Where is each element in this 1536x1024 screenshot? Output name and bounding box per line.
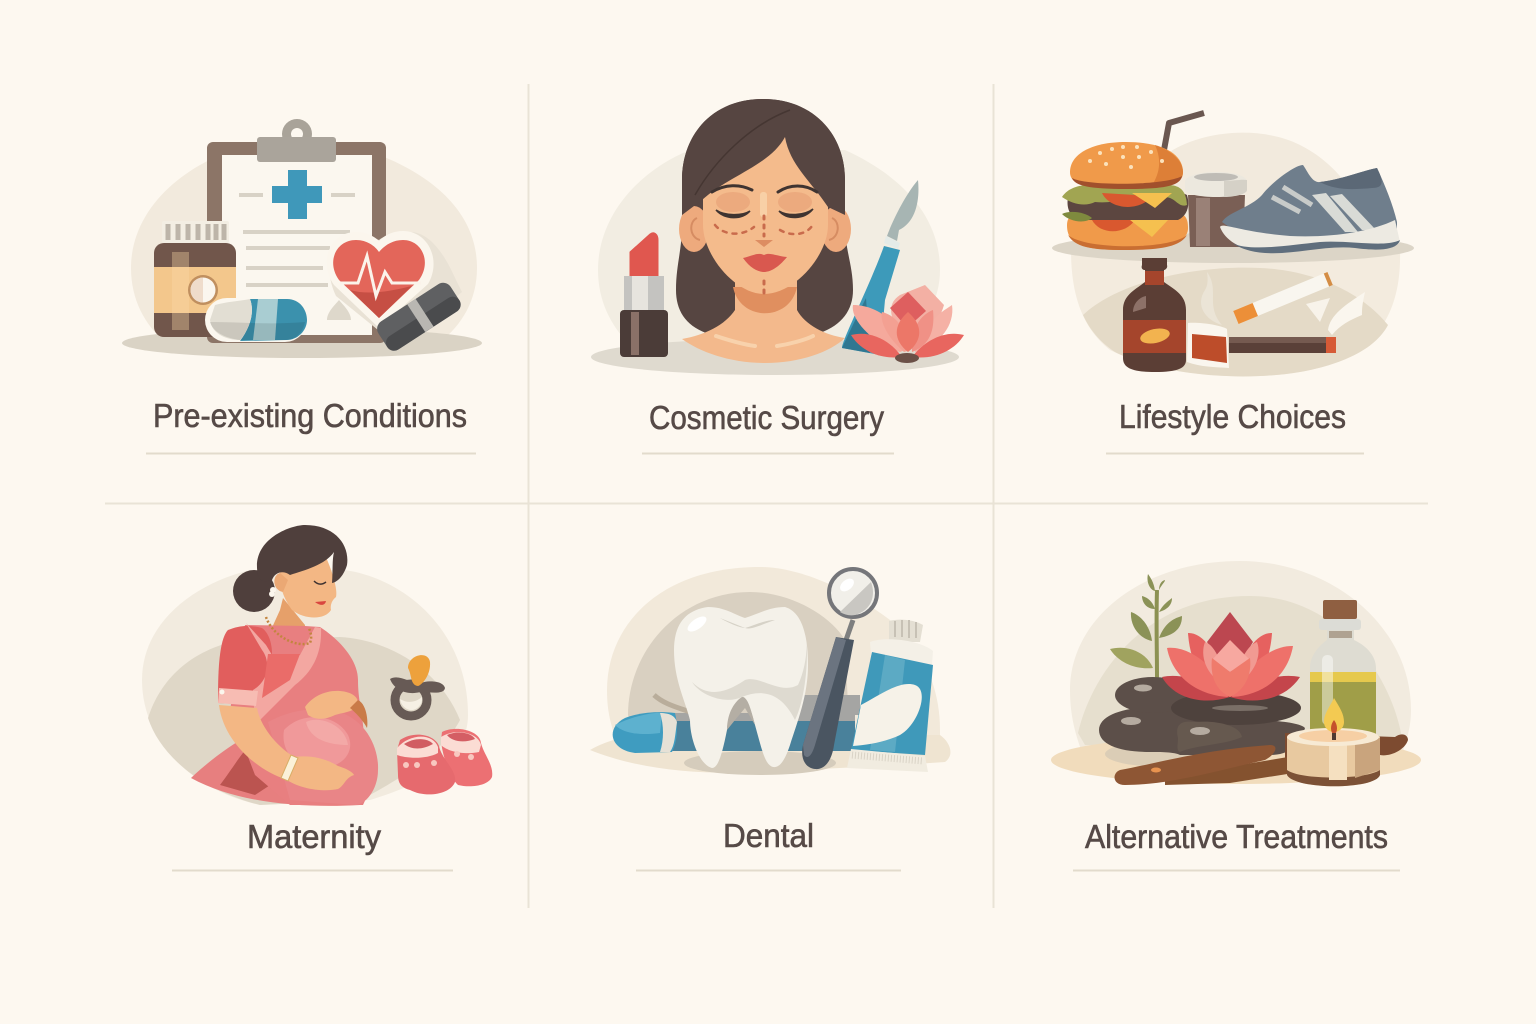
icon: wood sticks xyxy=(1115,733,1408,785)
label: Maternity xyxy=(247,818,381,855)
panel: dental xyxy=(590,567,950,870)
icon: clipboard xyxy=(207,119,386,343)
icon: dark tube xyxy=(374,279,464,354)
icon: baby booties xyxy=(397,729,492,794)
ground shadow xyxy=(591,339,959,375)
icon backdrop xyxy=(598,150,940,345)
icon backdrop xyxy=(1070,561,1411,760)
panel: maternity xyxy=(142,525,492,870)
icon: toothpaste tube xyxy=(847,620,933,772)
shadow under tooth xyxy=(684,751,836,775)
icon backdrop xyxy=(131,145,477,342)
icon: lipstick xyxy=(620,233,668,357)
backdrop inner xyxy=(628,592,850,750)
icon backdrop bottom xyxy=(1071,250,1400,376)
label: Pre-existing Conditions xyxy=(153,397,467,434)
label: Alternative Treatments xyxy=(1085,818,1388,855)
icon: tooth xyxy=(674,607,808,768)
panel: alternative treatments xyxy=(1051,561,1421,870)
icon: burger xyxy=(1062,113,1204,250)
icon: medicine bottle xyxy=(154,221,236,337)
icon: capsule xyxy=(205,298,307,342)
icon: liquor bottle xyxy=(1123,258,1186,372)
backdrop inner xyxy=(1083,268,1388,376)
label: Cosmetic Surgery xyxy=(649,399,884,436)
icon: coffee cup xyxy=(1185,172,1247,247)
ground inner shadow xyxy=(1105,741,1225,767)
backdrop inner xyxy=(1078,596,1403,745)
icon backdrop xyxy=(607,567,940,750)
icon: woman with surgery marks xyxy=(676,99,853,363)
icon: candle xyxy=(1287,698,1380,786)
panel: pre-existing conditions xyxy=(122,119,482,454)
icon: lotus xyxy=(851,285,964,363)
backdrop inner xyxy=(148,637,460,805)
icon: heart monitor xyxy=(327,231,462,335)
icon: plant xyxy=(1110,574,1182,678)
icon: cigarette xyxy=(1233,272,1333,324)
icon: oil bottle xyxy=(1310,600,1376,735)
label: Lifestyle Choices xyxy=(1119,398,1346,435)
icon: scalpel xyxy=(842,180,918,355)
label: Dental xyxy=(723,817,814,854)
panel: lifestyle choices xyxy=(1052,113,1414,454)
panel: cosmetic surgery xyxy=(591,99,964,454)
icon: lotus flower xyxy=(1162,612,1300,701)
ground shadow xyxy=(122,328,482,358)
icon: tissue xyxy=(1306,292,1365,335)
ground shadow xyxy=(590,735,950,773)
icon: pacifier xyxy=(390,655,445,716)
icon: toothbrush xyxy=(613,695,860,753)
ground shadow xyxy=(1052,233,1414,263)
ground sand xyxy=(1051,736,1421,784)
icon backdrop xyxy=(142,570,468,805)
icon: lighter and smoke xyxy=(1187,272,1336,368)
icon: dental mirror xyxy=(802,569,877,769)
icon: stacked stones xyxy=(1099,677,1305,755)
icon: sneaker xyxy=(1220,165,1400,253)
icon: pregnant woman xyxy=(191,525,378,806)
icon backdrop top xyxy=(1165,133,1372,240)
